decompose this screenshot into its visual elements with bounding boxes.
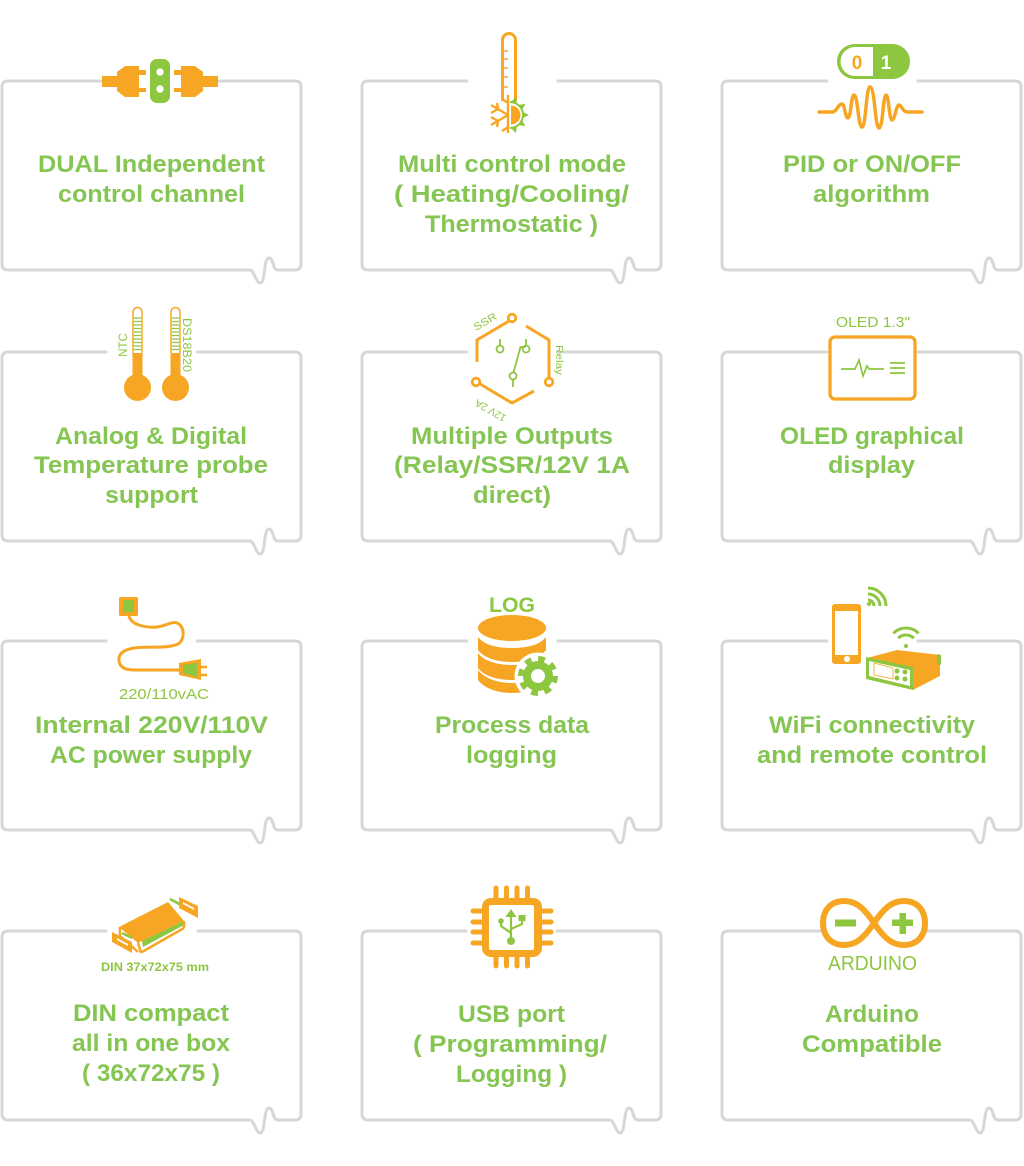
- text: multiple outputs: direct): [473, 482, 551, 509]
- text: dual independent: control channel: [58, 181, 245, 208]
- panel outline: [722, 931, 1021, 1133]
- icon: power cable and plug: [119, 597, 209, 703]
- panel: oled graphical display: [722, 315, 1021, 554]
- text: multi control mode: ( Heating/Cooling/: [394, 181, 629, 208]
- text: wifi connectivity: WiFi connectivity: [769, 712, 976, 739]
- icon: hexagon output switch: 12V 2A: [473, 396, 508, 424]
- text: process data logging: Process data: [435, 712, 590, 739]
- text: process data logging: logging: [466, 742, 557, 769]
- text: pid or on/off: PID or ON/OFF: [783, 151, 961, 178]
- icon: smartphone with wifi: [832, 588, 886, 664]
- panel outline: [362, 352, 661, 554]
- text: internal power supply: Internal 220V/110V: [35, 712, 268, 739]
- text: din compact: DIN compact: [73, 1000, 229, 1027]
- panel outline: [722, 352, 1021, 554]
- panel: pid or on/off algorithm: [722, 44, 1021, 283]
- icon: controller device with wifi: [866, 628, 941, 690]
- text: multiple outputs: (Relay/SSR/12V 1A: [394, 452, 630, 479]
- text: arduino compatible: Arduino: [825, 1001, 919, 1028]
- text: oled graphical display: OLED graphical: [780, 423, 964, 450]
- icon: 0/1 toggle switch: [837, 44, 910, 79]
- icon: 0/1 toggle switch: 1: [881, 53, 892, 74]
- panel outline: [362, 641, 661, 843]
- text: multi control mode: Multi control mode: [398, 151, 626, 178]
- icon: log database with gear: LOG: [489, 594, 535, 617]
- icon: OLED screen: OLED 1.3": [836, 315, 910, 331]
- icon: thermometer with snowflake and sun: [491, 34, 529, 134]
- panel: multi control mode: [362, 34, 661, 283]
- icon: oscillating waveform: [819, 87, 922, 128]
- text: multi control mode: Thermostatic ): [425, 211, 598, 238]
- icon: arduino infinity logo: ARDUINO: [828, 953, 917, 975]
- icon: hexagon output switch: [472, 310, 565, 424]
- panel: din compact box: [2, 897, 301, 1133]
- panel outline: [2, 81, 301, 283]
- text: arduino compatible: Compatible: [802, 1031, 942, 1058]
- icon: 0/1 toggle switch: 0: [852, 53, 862, 74]
- icon: arduino infinity logo: [823, 901, 925, 975]
- icon: din enclosure exploded: DIN 37x72x75 mm: [101, 962, 209, 974]
- text: analog and digital: support: [105, 482, 198, 509]
- icon: NTC and DS18B20 thermometers: DS18B20: [180, 318, 194, 372]
- panel: internal ac power supply: [2, 597, 301, 843]
- panel outline: [2, 931, 301, 1133]
- text: analog and digital: Temperature probe: [34, 452, 268, 479]
- text: oled graphical display: display: [828, 452, 916, 479]
- panel: usb port: [362, 888, 661, 1133]
- text: pid or on/off: algorithm: [813, 181, 930, 208]
- text: wifi connectivity: and remote control: [757, 742, 987, 769]
- panel: arduino compatible: [722, 901, 1021, 1133]
- text: usb port: USB port: [458, 1001, 565, 1028]
- panel outline: [722, 81, 1021, 283]
- text: internal power supply: AC power supply: [50, 742, 253, 769]
- icon: hexagon output switch: Relay: [553, 345, 565, 376]
- text: analog and digital: Analog & Digital: [55, 423, 247, 450]
- panel outline: [362, 81, 661, 283]
- icon: microchip with usb symbol: [473, 888, 551, 966]
- panel outline: [2, 352, 301, 554]
- text: din compact: ( 36x72x75 ): [82, 1060, 220, 1087]
- icon: OLED screen: [830, 315, 915, 399]
- icon: two plugs and socket: [102, 59, 218, 103]
- panel outline: [2, 641, 301, 843]
- icon: NTC and DS18B20 thermometers: [116, 308, 194, 401]
- panel: multiple outputs: [362, 310, 661, 554]
- text: multiple outputs: Multiple Outputs: [411, 423, 613, 450]
- panel: analog and digital temperature probe: [2, 308, 301, 554]
- text: usb port: ( Programming/: [413, 1031, 607, 1058]
- icon: hexagon output switch: SSR: [472, 310, 500, 334]
- panel: process data logging: [362, 594, 661, 843]
- text: din compact: all in one box: [72, 1030, 231, 1057]
- panel: wifi connectivity: [722, 588, 1021, 843]
- icon: log database with gear: [478, 594, 562, 700]
- panel outline: [362, 931, 661, 1133]
- icon: NTC and DS18B20 thermometers: NTC: [116, 333, 130, 357]
- panel: dual independent control channel: [2, 59, 301, 283]
- icon: power cable and plug: 220/110vAC: [119, 686, 209, 703]
- text: usb port: Logging ): [456, 1061, 567, 1088]
- text: dual independent: DUAL Independent: [38, 151, 265, 178]
- icon: din enclosure exploded: [101, 897, 209, 974]
- panel outline: [722, 641, 1021, 843]
